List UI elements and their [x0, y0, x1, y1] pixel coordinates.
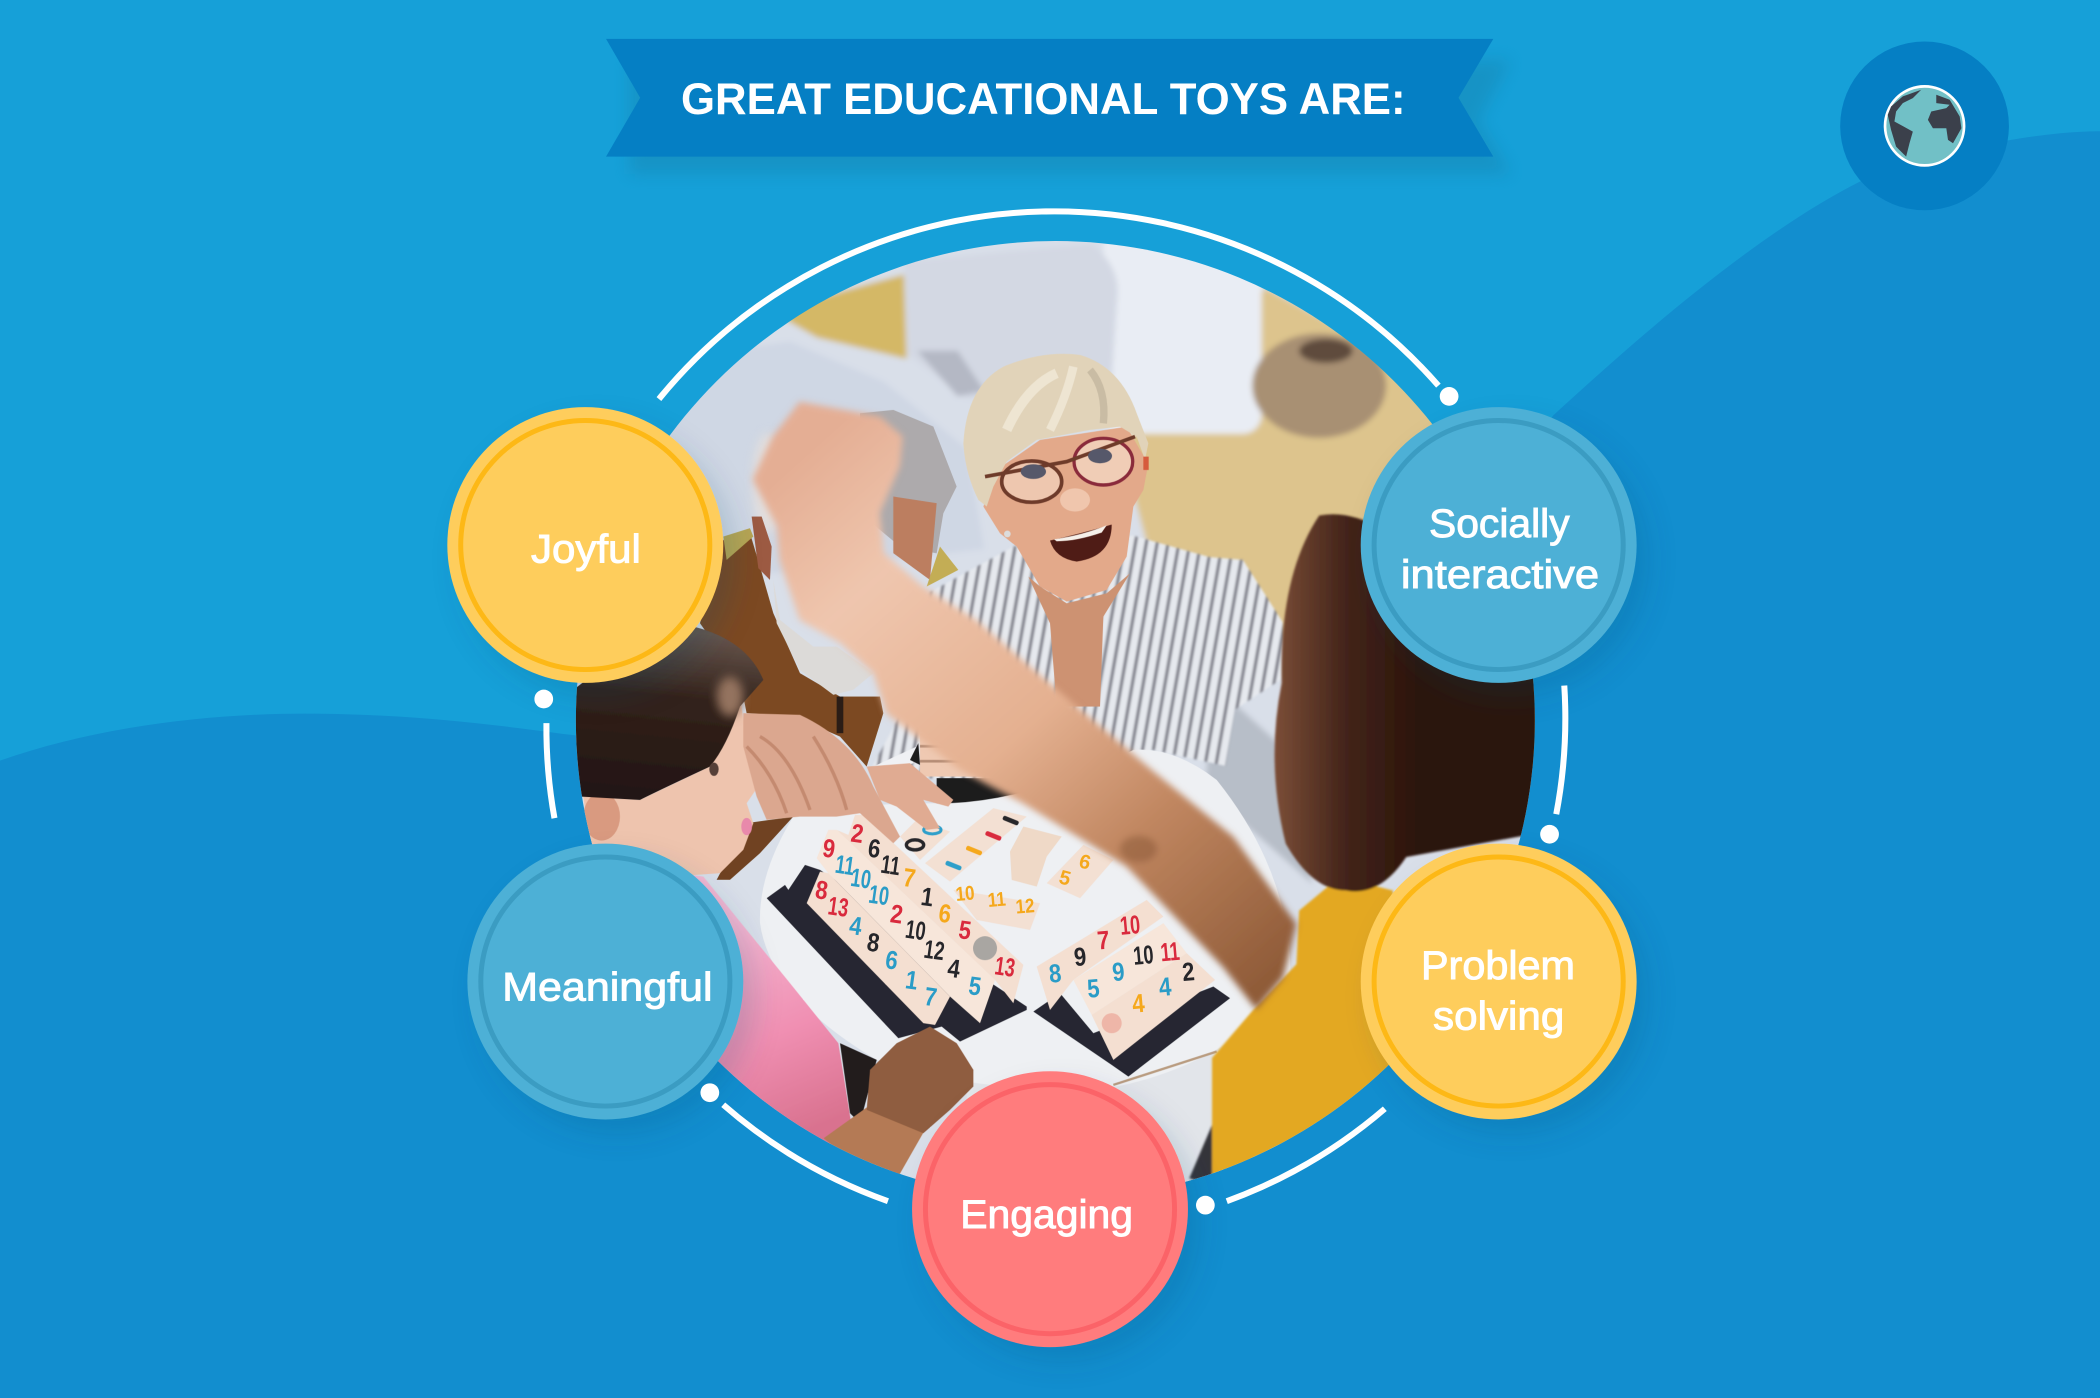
tile numbers: 8 [1048, 959, 1062, 989]
badge: Engaging: Engaging [960, 1192, 1133, 1237]
tile numbers: 4 [1131, 989, 1146, 1019]
tile numbers: 9 [1111, 958, 1126, 988]
tile numbers: 10 [849, 863, 873, 894]
tile numbers: 7 [901, 863, 917, 894]
stacked tiles behind table [876, 736, 1016, 804]
tile numbers: 5 [1057, 866, 1073, 891]
table with racks and tiles (coordinates from close crop) [677, 750, 1291, 1200]
badge: Problem solving [1361, 844, 1637, 1119]
left girl and man's hands (coordinates from close crop) [572, 627, 953, 880]
badge: Engaging [912, 1071, 1188, 1347]
left rack [767, 815, 1027, 1042]
photo: family playing number tile game [562, 228, 1554, 1200]
badge: Problem solving: Problem [1421, 943, 1575, 988]
right rack [1033, 900, 1230, 1077]
tile numbers: 4 [847, 911, 864, 942]
tile numbers: 4 [1158, 972, 1173, 1003]
man's hand [743, 713, 900, 843]
tile numbers: 11 [879, 850, 902, 881]
tile numbers: 9 [1073, 943, 1087, 973]
woman shirt [871, 536, 1286, 803]
tile numbers: 8 [813, 876, 830, 906]
girl's lips [741, 818, 752, 835]
badge: Joyful [447, 407, 723, 683]
tile numbers: 1 [903, 966, 920, 996]
tile numbers: 10 [955, 881, 975, 905]
girl's ear [583, 793, 620, 841]
woman face (coordinates from close crop) [963, 354, 1149, 707]
man's other hand [867, 763, 953, 830]
tile numbers: 10 [1119, 910, 1141, 941]
table top [760, 750, 1291, 1193]
tile numbers: 2 [849, 819, 865, 849]
tile numbers: 6 [883, 946, 900, 976]
tile numbers: 10 [904, 915, 928, 946]
room background [562, 228, 1554, 1192]
tile numbers: 8 [865, 928, 881, 958]
tile numbers: 7 [922, 982, 939, 1013]
tile numbers: 13 [993, 951, 1017, 983]
tile numbers: 2 [1181, 958, 1196, 988]
man (coordinates from close crop) [700, 410, 958, 880]
tile numbers: 12 [922, 935, 946, 966]
raised blurred arm [753, 402, 1296, 1010]
girl's hair [572, 627, 763, 800]
badge: Problem solving: solving [1433, 994, 1564, 1039]
banner shadow [629, 60, 1511, 174]
pink shirt and child's hand [694, 875, 974, 1174]
loose tiles [900, 808, 1122, 1033]
tile numbers: 12 [1015, 894, 1035, 918]
tile numbers: 10 [1132, 940, 1155, 971]
banner [606, 39, 1511, 174]
ring dots [534, 387, 1559, 1215]
tile numbers: 6 [866, 834, 882, 864]
tile numbers: 4 [946, 954, 963, 985]
tile numbers: 10 [867, 880, 891, 911]
tile numbers: 5 [967, 972, 983, 1002]
tile numbers: 11 [833, 850, 856, 881]
badge: Joyful: Joyful [531, 526, 641, 571]
ring arcs [546, 211, 1565, 1201]
tile numbers: 6 [1077, 850, 1093, 875]
tile numbers: 9 [821, 834, 837, 864]
title: GREAT EDUCATIONAL TOYS ARE: [681, 75, 1406, 124]
tile numbers: 6 [937, 899, 953, 929]
tile numbers: 11 [1159, 937, 1181, 967]
tile numbers: 2 [888, 900, 905, 930]
tile numbers [813, 819, 1196, 1019]
badge: Meaningful [467, 844, 743, 1119]
tile numbers: 5 [1086, 974, 1101, 1004]
tile numbers: 7 [1096, 926, 1111, 956]
tile numbers: 11 [987, 887, 1007, 911]
badge: Meaningful: Meaningful [502, 964, 712, 1009]
tile numbers: 13 [826, 891, 850, 923]
girl's face [583, 706, 756, 875]
badge: Socially interactive [1361, 407, 1637, 683]
tile numbers: 1 [919, 882, 935, 913]
banner ribbon [606, 39, 1493, 157]
tile numbers: 5 [957, 916, 973, 946]
icon: globe badge [1840, 42, 2009, 210]
badge: Socially interactive: Socially [1429, 501, 1570, 546]
badge: Socially interactive: interactive [1401, 552, 1599, 597]
right girl shirt and hair [1189, 514, 1554, 1185]
